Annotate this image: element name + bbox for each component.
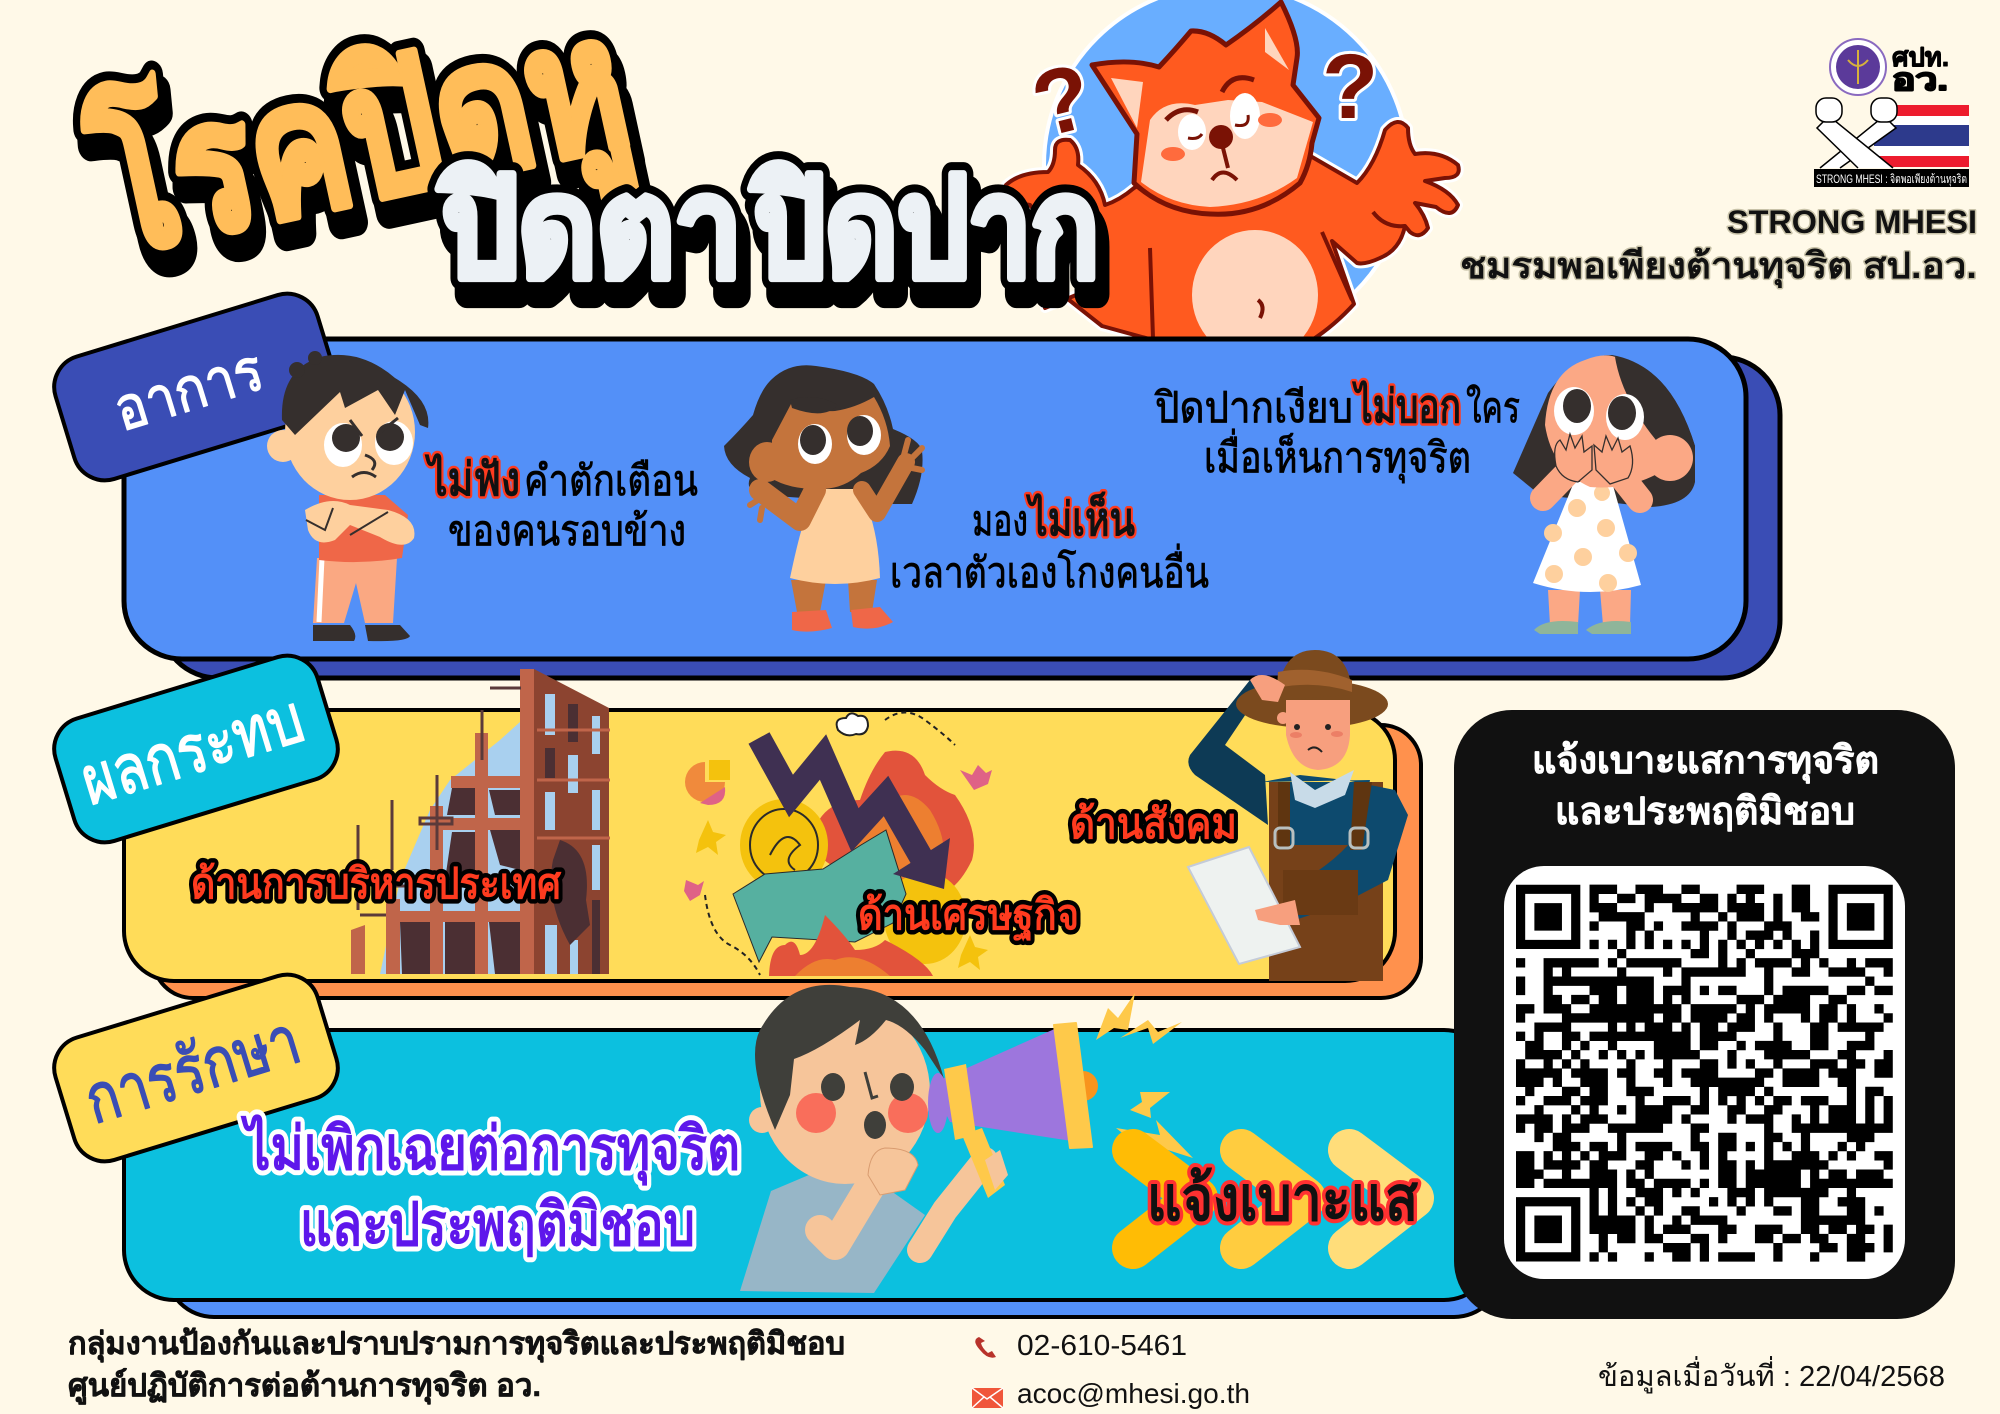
title line 2: ปิดปาก: [756, 168, 1105, 322]
question mark left: ?: [1022, 45, 1102, 157]
icon: phone: [975, 1337, 996, 1358]
text: does not listen: ไม่ฟัง: [424, 453, 520, 505]
megaphone: [928, 1023, 1098, 1198]
crossed arms: [1816, 98, 1897, 168]
footer: data date: ข้อมูลเมื่อวันที่ : 22/04/2568: [1598, 1356, 1945, 1394]
tag: treatment: [46, 967, 346, 1169]
club name heading: STRONG MHESI: [1727, 204, 1977, 240]
icon: three chevrons: [1133, 1150, 1413, 1248]
logo caption: [1814, 169, 1969, 187]
panel: impact background: [124, 710, 1421, 998]
character: girl covering mouth: [1513, 355, 1695, 634]
label: economy: ด้านเศรษฐกิจ: [858, 891, 1079, 942]
tag: impact: [46, 648, 346, 850]
text: do not ignore corruption: [240, 1113, 740, 1258]
question mark right: ?: [1322, 36, 1378, 138]
organisation name: ศปท.: [1892, 42, 1949, 72]
emblem: [1830, 39, 1886, 95]
character: boy with megaphone: [740, 985, 1193, 1293]
character: farmer: [1188, 650, 1408, 981]
title line 2: ปิดตา: [444, 168, 748, 322]
tag: symptoms: [46, 286, 346, 488]
text: does not listen: ของคนรอบข้าง: [448, 507, 686, 554]
illustration: economic crash with coins and fire: [684, 712, 992, 976]
lightning bolts: [1096, 993, 1193, 1158]
logo: organisation and Strong MHESI mark: [1814, 39, 1969, 187]
title line 2: ปิดปาก: [750, 152, 1099, 306]
character: girl covering eyes: [724, 365, 923, 632]
tag: treatment: การรักษา: [76, 1002, 309, 1139]
title line 2: ปิดตา: [438, 152, 742, 306]
panel: treatment background: [124, 1030, 1502, 1317]
mascot: confused fox: [1005, 0, 1459, 360]
text: keeps silent: [1154, 380, 1520, 484]
club name heading: ชมรมพอเพียงต้านทุจริต สป.อว.: [1460, 245, 1977, 289]
text: do not ignore corruption: และประพฤติมิชอบ: [300, 1191, 695, 1258]
label: country administration: ด้านการบริหารประเทศ: [191, 860, 562, 907]
text: does not listen: คำตักเตือน: [524, 457, 698, 504]
label: society: ด้านสังคม: [1070, 800, 1237, 847]
footer: department name: [68, 1326, 845, 1405]
panel: report channel with QR: และประพฤติมิชอบ: [1555, 791, 1855, 833]
footer: phone number: 02-610-5461: [1017, 1330, 1187, 1362]
Thai flag: [1874, 105, 1969, 167]
text: keeps silent: ปิดปากเงียบ: [1154, 384, 1353, 431]
panel: report channel with QR: [1454, 710, 1955, 1319]
text: do not ignore corruption: ไม่เพิกเฉยต่อการทุจริต: [240, 1113, 740, 1186]
logo: organisation and Strong MHESI mark: อว.: [1892, 64, 1948, 97]
text: does not listen: [424, 453, 698, 554]
text: does not see: มอง: [972, 497, 1028, 544]
text: keeps silent: เมื่อเห็นการทุจริต: [1204, 429, 1471, 484]
label: report: แจ้งเบาะแส: [1147, 1165, 1418, 1234]
panel: symptoms background: [124, 339, 1780, 678]
tag: impact: ผลกระทบ: [72, 680, 312, 820]
footer: department name: ศูนย์ปฏิบัติการต่อต้านการทุจริต อว.: [68, 1368, 541, 1405]
footer: department name: กลุ่มงานป้องกันและปราบปรามการทุจริตและประพฤติมิชอบ: [68, 1326, 845, 1363]
illustration: damaged building: [351, 669, 610, 974]
title line 2: [438, 152, 1105, 322]
title line 2: ปิดปาก: [750, 152, 1099, 306]
text: keeps silent: ไม่บอก: [1351, 380, 1461, 432]
icon: mail: [972, 1388, 1003, 1408]
character: angry boy: [267, 351, 428, 641]
panel heading: แจ้งเบาะแสการทุจริต: [1532, 740, 1879, 784]
footer: email: acoc@mhesi.go.th: [1017, 1378, 1250, 1409]
text: does not see: [890, 491, 1209, 596]
club name heading: [1460, 204, 1977, 289]
title line 2: ปิดตา: [438, 152, 742, 306]
text: does not see: ไม่เห็น: [1025, 491, 1135, 545]
text: keeps silent: ใคร: [1466, 384, 1520, 431]
tag: symptoms: อาการ: [106, 336, 271, 444]
text: does not see: เวลาตัวเองโกงคนอื่น: [890, 544, 1209, 596]
QR code: [1504, 866, 1905, 1279]
